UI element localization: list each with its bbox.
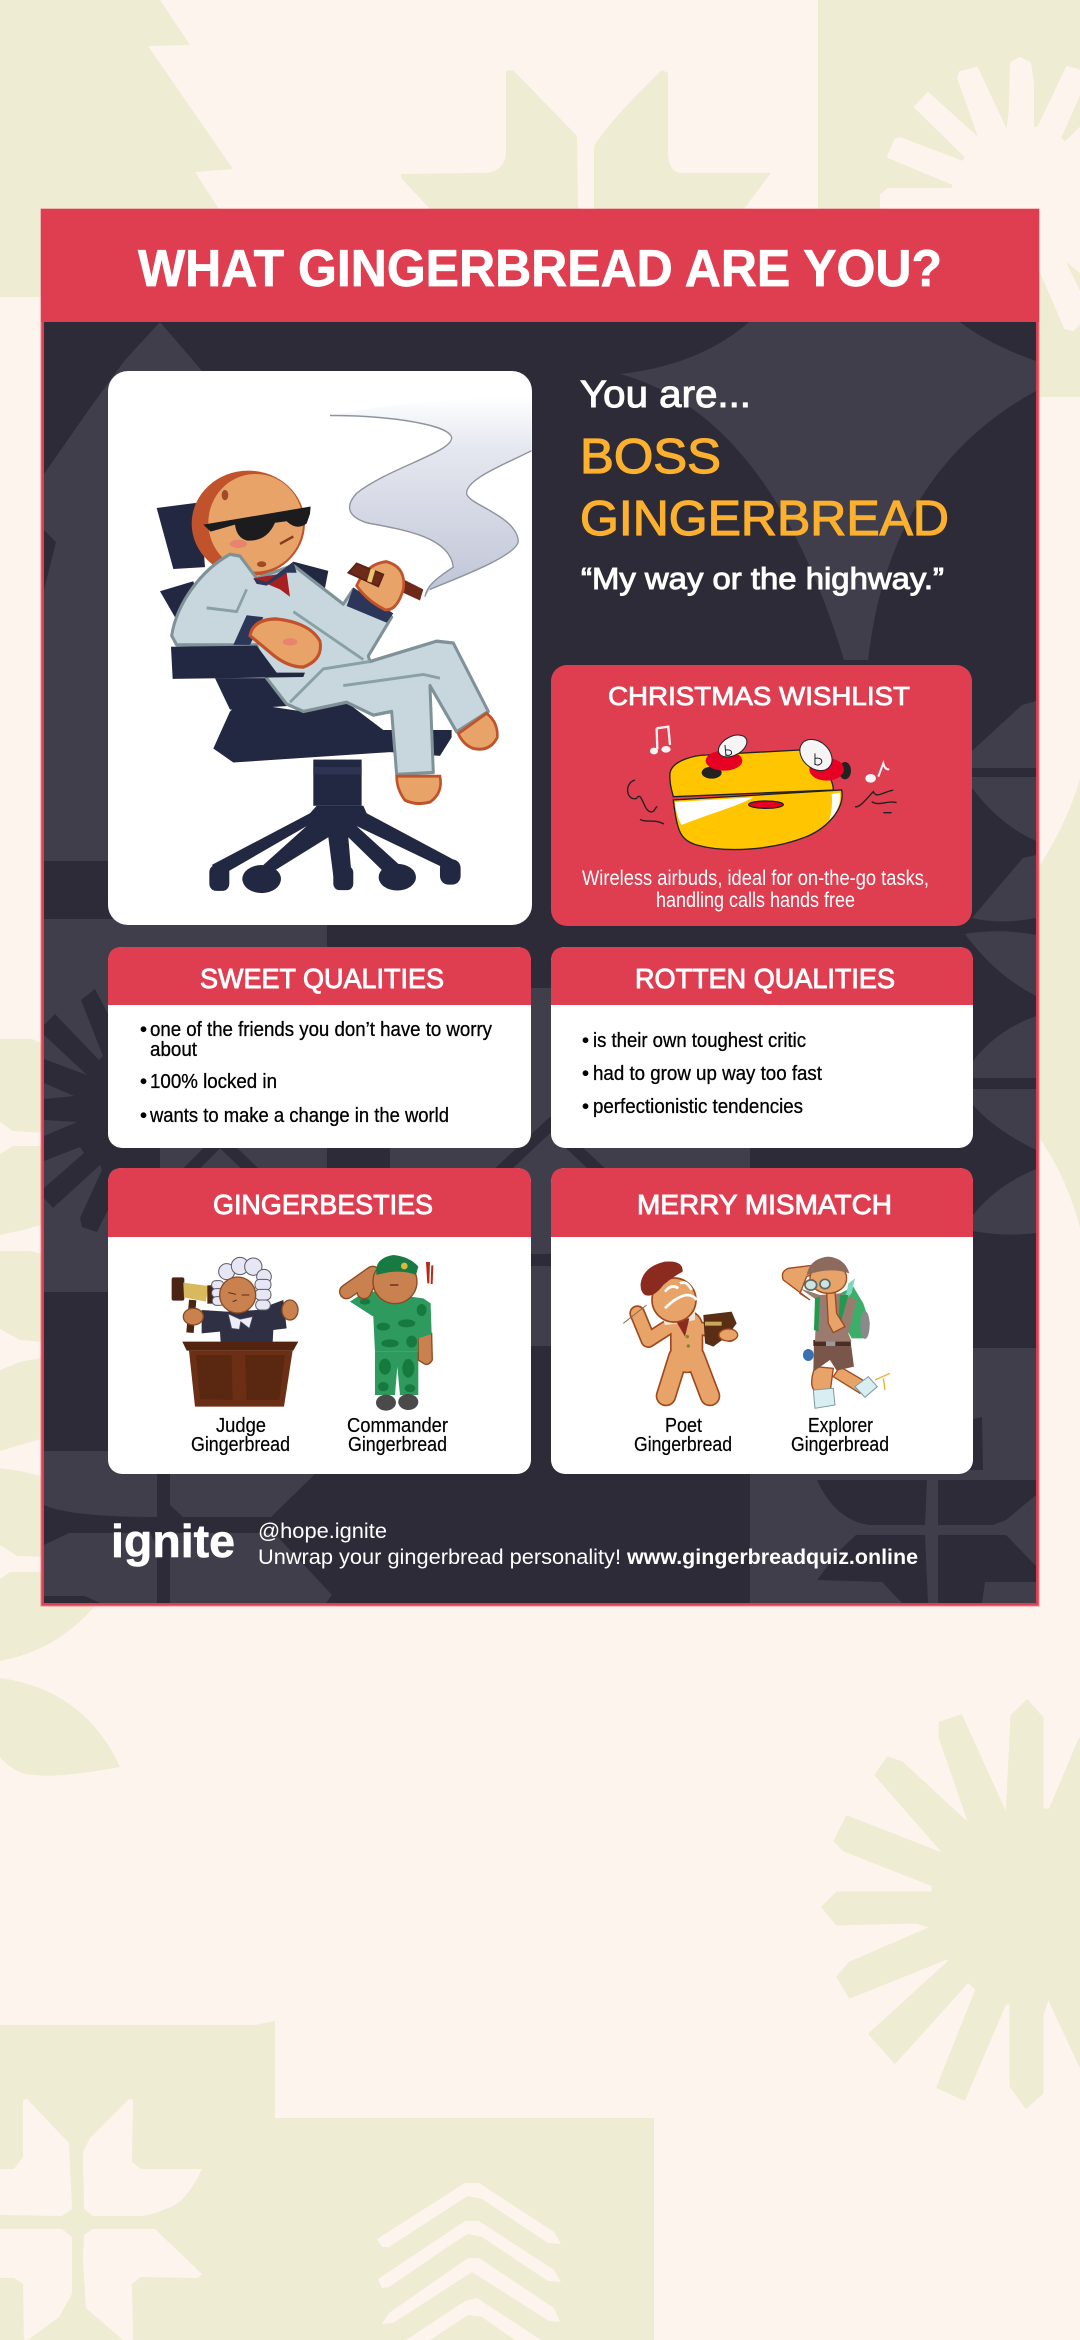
text: social handle: @hope.ignite: [258, 1520, 387, 1543]
heading: merry mismatch: MERRY MISMATCH: [637, 1189, 892, 1220]
list: rotten qualities: •: [582, 1063, 589, 1085]
panel: character portrait: [108, 371, 532, 925]
heading: result: [580, 374, 949, 596]
main panel: [41, 209, 1039, 1606]
list: rotten qualities: •: [582, 1096, 589, 1118]
text: judge label: [191, 1415, 290, 1456]
list: rotten qualities: had to grow up way too fast: [593, 1063, 822, 1085]
list: sweet qualities: •: [140, 1105, 147, 1127]
background shapes: right side leaf: [1030, 779, 1080, 1228]
list: rotten qualities: is their own toughest critic: [593, 1030, 806, 1052]
text: call to action: www.gingerbreadquiz.online: [626, 1546, 918, 1569]
heading: rotten qualities: ROTTEN QUALITIES: [635, 963, 895, 994]
list: sweet qualities: [140, 1019, 492, 1127]
panel pattern: dark band left: [44, 861, 1036, 1603]
background shapes: top centre arrow: [401, 70, 771, 209]
text: commander label: Gingerbread: [348, 1434, 447, 1456]
illustration: wireless earbuds case: [628, 727, 897, 850]
text: commander label: [347, 1415, 448, 1456]
text: call to action: Unwrap your gingerbread personality!: [258, 1546, 621, 1569]
illustration: boss gingerbread in office chair: [157, 397, 532, 893]
footer: [111, 1515, 918, 1569]
text: judge label: Judge: [216, 1415, 266, 1437]
text: wishlist description: [582, 867, 929, 912]
panel pattern: dark chevrons: [180, 1125, 630, 1260]
text: poet label: [634, 1415, 732, 1456]
text: poet label: Poet: [665, 1415, 702, 1437]
text: you are: You are...: [580, 374, 751, 416]
background shapes: chevrons: [377, 2183, 561, 2340]
list: sweet qualities: •: [140, 1071, 147, 1093]
panel: gingerbesties: [108, 1168, 531, 1474]
text: quote: “My way or the highway.”: [581, 561, 944, 596]
panel: rotten qualities: [551, 947, 973, 1148]
illustration: poet gingerbread: [623, 1261, 738, 1396]
text: gingerbread: GINGERBREAD: [580, 492, 949, 546]
heading: sweet qualities: SWEET QUALITIES: [200, 963, 444, 994]
list: sweet qualities: 100% locked in: [150, 1071, 277, 1093]
title: WHAT GINGERBREAD ARE YOU?: [138, 240, 942, 298]
title banner: [41, 209, 1039, 322]
list: sweet qualities: about: [150, 1039, 197, 1061]
background shapes: top left: [0, 0, 233, 297]
background shapes: left side leaves: [0, 1039, 120, 1776]
text: explorer label: Gingerbread: [791, 1434, 889, 1456]
illustration: judge gingerbread: [172, 1257, 298, 1407]
illustration: explorer gingerbread: [782, 1257, 890, 1408]
list: rotten qualities: perfectionistic tendencies: [593, 1096, 803, 1118]
panel: merry mismatch: [551, 1168, 973, 1474]
panel: christmas wishlist: [551, 665, 972, 926]
heading: christmas wishlist: CHRISTMAS WISHLIST: [608, 681, 910, 711]
panel pattern: dark sunburst: [44, 989, 160, 1232]
text: explorer label: Explorer: [808, 1415, 873, 1437]
background shapes: lower left block: [0, 2021, 654, 2340]
panel pattern: [44, 322, 1036, 1603]
background shapes: top right sunburst: [818, 0, 1080, 397]
text: wishlist description: handling calls hands free: [656, 889, 855, 912]
list: sweet qualities: •: [140, 1019, 147, 1041]
logo: ignite: ignite: [111, 1515, 235, 1567]
text: commander label: Commander: [347, 1415, 448, 1437]
background shapes: lower right sunburst: [823, 1701, 1080, 2107]
list: sweet qualities: wants to make a change in the world: [149, 1105, 449, 1127]
list: sweet qualities: one of the friends you don’t have to worry: [150, 1019, 492, 1041]
heading: gingerbesties: GINGERBESTIES: [213, 1189, 433, 1220]
text: wishlist description: Wireless airbuds, ideal for on-the-go tasks,: [582, 867, 929, 890]
text: boss: BOSS: [580, 430, 721, 484]
text: explorer label: [791, 1415, 889, 1456]
list: rotten qualities: [582, 1030, 822, 1118]
text: poet label: Gingerbread: [634, 1434, 732, 1456]
text: call to action: [258, 1546, 918, 1569]
background shapes: cross lobes: [0, 2099, 202, 2340]
panel: sweet qualities: [108, 947, 531, 1148]
text: judge label: Gingerbread: [191, 1434, 290, 1456]
illustration: commander gingerbread: [347, 1255, 433, 1411]
list: rotten qualities: •: [582, 1030, 589, 1052]
